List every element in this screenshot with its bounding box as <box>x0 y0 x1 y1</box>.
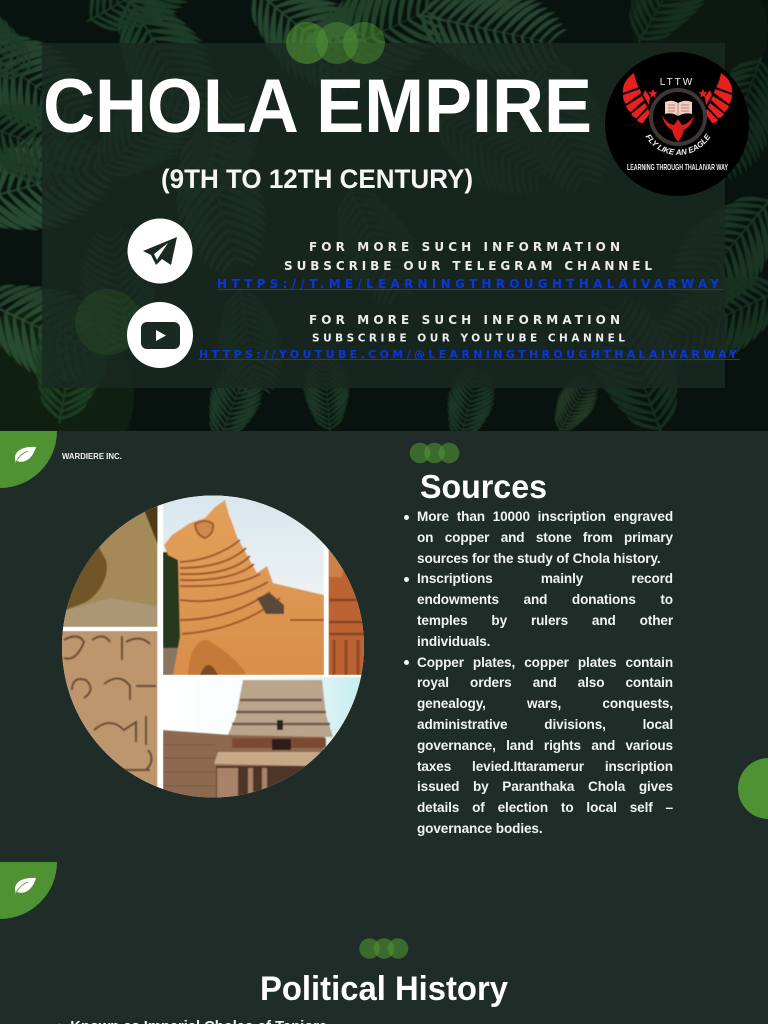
photo collage <box>62 496 364 798</box>
corner badge with leaf icon, second <box>0 862 57 919</box>
title: CHOLA EMPIRE <box>43 64 592 149</box>
telegram call to action: FOR MORE SUCH INFORMATION <box>309 240 620 254</box>
temple gopuram photo <box>163 677 361 750</box>
bullet list: sources: issued by Paranthaka Chola gives <box>417 779 673 794</box>
youtube call to action <box>199 313 740 361</box>
bullet list: sources: genealogy, wars, conquests, <box>417 696 673 711</box>
subtitle: (9TH TO 12TH CENTURY) <box>161 164 473 194</box>
heading: political history: Political History <box>260 970 508 1008</box>
side half circle <box>738 758 768 819</box>
heading: sources: Sources <box>420 468 547 505</box>
top-left rock <box>66 512 158 627</box>
bullet list: sources: More than 10000 inscription engraved <box>417 509 673 524</box>
hero banner: jungle background <box>0 0 768 431</box>
bullet list: sources: on copper and stone from primary <box>417 530 673 545</box>
bullet list: sources: governance, land rights and various <box>417 738 673 753</box>
icon: telegram <box>128 218 192 284</box>
corner badge with leaf icon <box>0 431 57 488</box>
logo: LTTW eagle emblem: FLY LIKE AN EAGLE <box>645 133 710 155</box>
telegram call to action <box>217 240 723 291</box>
telegram call to action: HTTPS://T.ME/LEARNINGTHROUGHTHALAIVARWAY <box>217 277 719 291</box>
bullet list: sources: details of election to local self – <box>417 800 673 815</box>
logo: LTTW eagle emblem: LTTW <box>660 77 694 88</box>
temple detail photo <box>328 550 364 675</box>
icon: youtube <box>127 302 193 368</box>
brand name: WARDIERE INC. <box>62 452 122 461</box>
bullet list: sources: temples by rulers and other <box>417 613 673 628</box>
telegram call to action: SUBSCRIBE OUR TELEGRAM CHANNEL <box>284 259 652 273</box>
bullet list: sources: taxes levied.Ittaramerur inscription <box>417 759 673 774</box>
bottom-left inscription <box>62 631 158 787</box>
bullet list: sources: administrative divisions, local <box>417 717 673 732</box>
bullet list: sources: governance bodies. <box>417 821 543 836</box>
youtube call to action: HTTPS://YOUTUBE.COM/@LEARNINGTHROUGHTHALAIVARWAY <box>199 348 738 361</box>
nandi bull photo <box>163 496 324 596</box>
bullet list: sources: individuals. <box>417 634 490 649</box>
bullet list: sources: endowments and donations to <box>417 592 673 607</box>
bullet list: sources <box>404 509 673 836</box>
bullet list: sources: Inscriptions mainly record <box>417 571 673 586</box>
youtube call to action: FOR MORE SUCH INFORMATION <box>309 313 620 327</box>
dot trio: sources <box>410 442 460 464</box>
bullet list: sources: Copper plates, copper plates contain <box>417 655 673 670</box>
bullet list: sources: royal orders and also contain <box>417 675 673 690</box>
logo: LTTW eagle emblem <box>605 52 749 196</box>
youtube call to action: SUBSCRIBE OUR YOUTUBE CHANNEL <box>312 332 625 344</box>
dot trio: political history <box>359 938 408 959</box>
bullet list: sources: sources for the study of Chola history. <box>417 551 661 566</box>
